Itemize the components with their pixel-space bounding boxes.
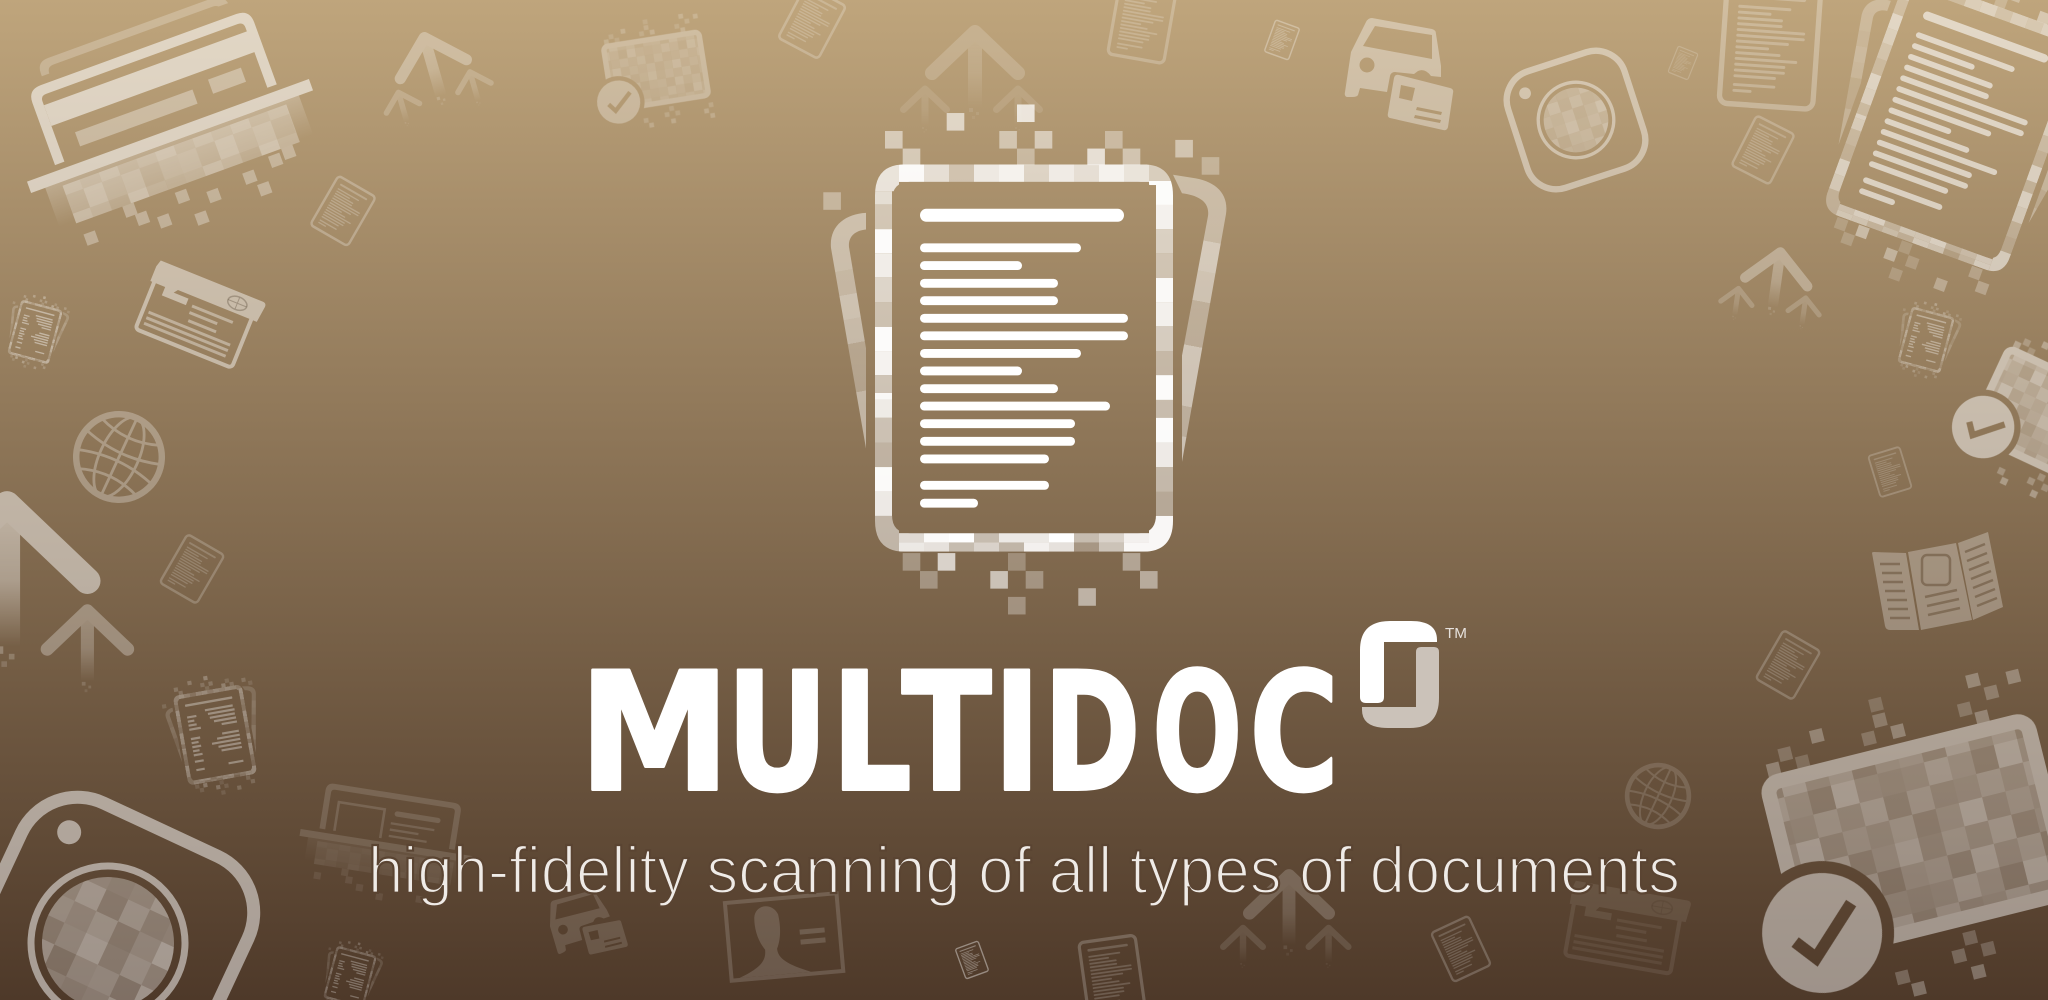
icon: arrows top left xyxy=(369,22,496,131)
icon: document right xyxy=(1756,630,1820,700)
icon: large stacked document top right xyxy=(1776,0,2048,326)
icon: card scanner top left xyxy=(0,0,343,276)
icon: document top right xyxy=(1719,0,1821,109)
icon: car and ID top xyxy=(1345,18,1453,130)
icon: portrait ID card xyxy=(725,893,843,981)
tagline: high-fidelity scanning of all types of documents xyxy=(368,833,1680,907)
icon: brochure xyxy=(1872,532,2003,630)
icon: verified pixel card right xyxy=(1936,313,2048,524)
icon: document xyxy=(310,176,376,246)
wordmark: U xyxy=(726,638,828,829)
wordmark: C xyxy=(1249,639,1339,829)
wordmark: I xyxy=(993,637,1041,829)
icon: small stacked document right xyxy=(1887,295,1965,385)
icon: stacked document lower left xyxy=(158,668,272,802)
icon: car and ID bottom xyxy=(537,878,632,974)
icon: document right middle xyxy=(1868,447,1912,497)
icon: document bottom xyxy=(1079,935,1145,1000)
trademark: TM xyxy=(1445,625,1467,642)
icon: large arrows left xyxy=(0,500,128,692)
icon: document right upper xyxy=(1731,115,1795,185)
icon: camera top right xyxy=(1499,43,1653,197)
icon: tiny document bottom xyxy=(955,941,989,979)
icon: document top xyxy=(1108,0,1176,64)
icon: arrows bottom xyxy=(1223,874,1348,968)
wordmark: O xyxy=(1152,637,1242,829)
icon: tiny document top right xyxy=(1668,46,1698,80)
icon: verified pixel card bottom right xyxy=(1712,662,2048,1000)
icon: globe bottom right xyxy=(1617,755,1699,837)
icon: globe xyxy=(62,400,176,514)
wordmark xyxy=(579,637,1339,829)
icon: document lower left xyxy=(160,534,224,604)
icon: small stacked document bottom xyxy=(314,935,387,1000)
icon: tiny document top xyxy=(1264,20,1300,60)
icon: arrows right xyxy=(1718,244,1827,332)
icon: ID card bottom right xyxy=(1561,880,1691,975)
icon: arrows top center xyxy=(904,30,1040,132)
icon: card scanner bottom xyxy=(292,780,480,913)
icon: document top center left xyxy=(778,0,846,59)
wordmark: M xyxy=(579,638,730,829)
icon: small stacked document left xyxy=(0,289,73,375)
icon: verified pixel card top xyxy=(585,11,715,135)
wordmark: T xyxy=(902,639,992,829)
icon: ID card xyxy=(132,260,266,371)
icon: document bottom right xyxy=(1431,916,1491,982)
icon: camera bottom left xyxy=(0,777,274,1000)
wordmark: D xyxy=(1043,638,1141,829)
wordmark: L xyxy=(831,637,912,829)
main document icon xyxy=(823,104,1226,614)
logo mark xyxy=(1360,621,1439,728)
